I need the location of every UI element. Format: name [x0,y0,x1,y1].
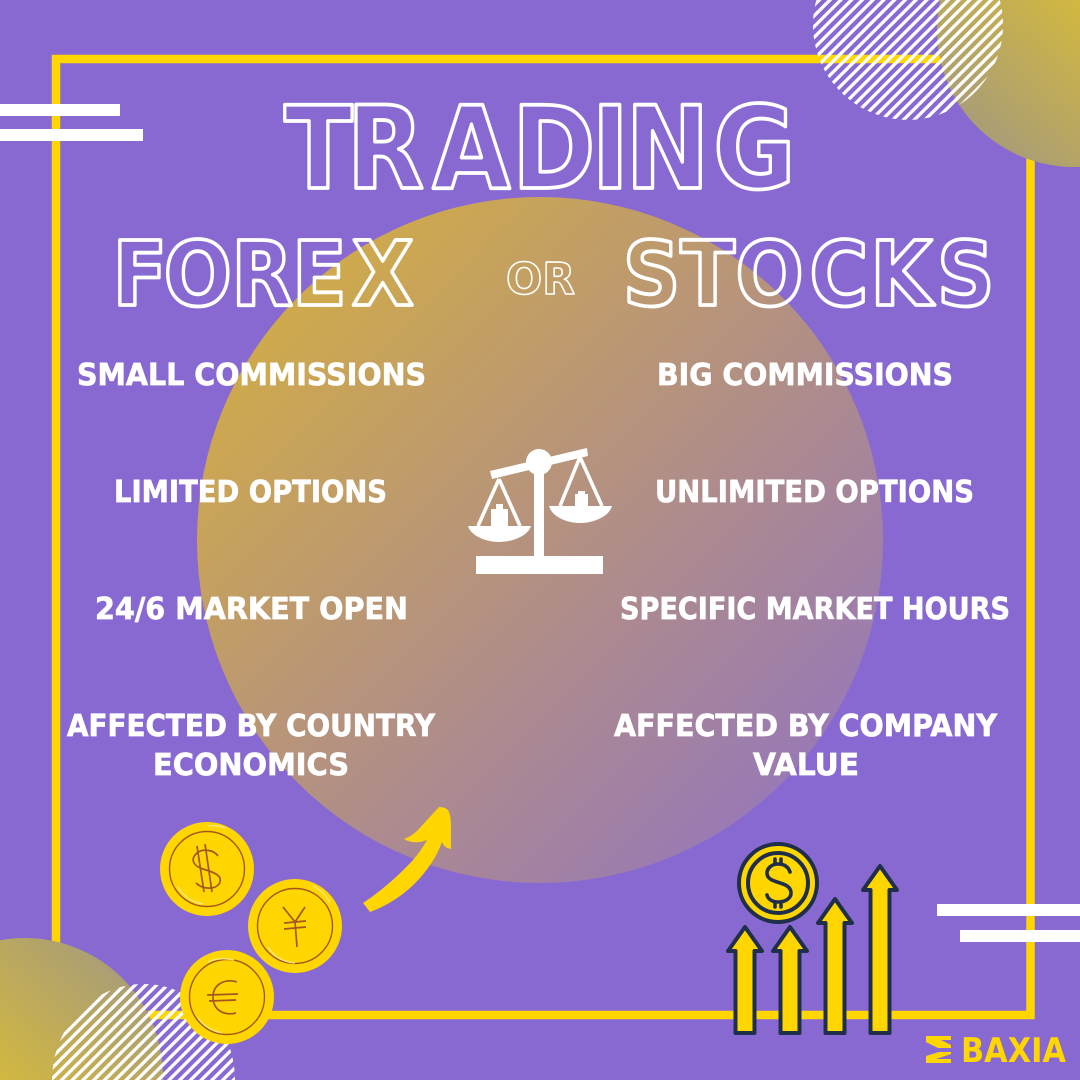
forex points [67,358,436,783]
logo: baxia: BAXIA [961,1031,1067,1071]
icon: balance scale [468,448,612,574]
forex points: LIMITED OPTIONS [114,475,387,510]
logo: baxia [926,1031,1067,1071]
hatched circle: bottom left [52,984,235,1080]
title: TRADING [284,83,796,216]
forex points: 24/6 MARKET OPEN [95,592,408,627]
corner circle: top right [937,0,1080,167]
yellow frame [56,59,1030,1015]
hatched circle: top right [813,0,1003,120]
corner circle: bottom left [0,938,163,1080]
arrow: curved yellow [363,807,451,912]
stocks points [614,358,1010,783]
forex points: SMALL COMMISSIONS [77,358,426,393]
icon: growth arrows with coin [728,844,897,1033]
white bars: top left [0,104,143,141]
heading: or: OR [506,254,575,305]
icon: coin dollar [160,822,254,916]
heading: stocks: STOCKS [623,222,995,326]
icon: coin yen [248,879,342,973]
stocks points: BIG COMMISSIONS [657,358,953,393]
heading: forex: FOREX [113,222,414,326]
central gradient circle [197,197,883,883]
forex points: AFFECTED BY COUNTRY [67,709,436,744]
stocks points: SPECIFIC MARKET HOURS [620,592,1010,627]
white bars: bottom right [937,904,1080,942]
forex points: ECONOMICS [153,748,349,783]
icon: coin euro [180,950,274,1044]
stocks points: AFFECTED BY COMPANY [614,709,998,744]
stocks points: UNLIMITED OPTIONS [655,475,974,510]
stocks points: VALUE [753,748,859,783]
